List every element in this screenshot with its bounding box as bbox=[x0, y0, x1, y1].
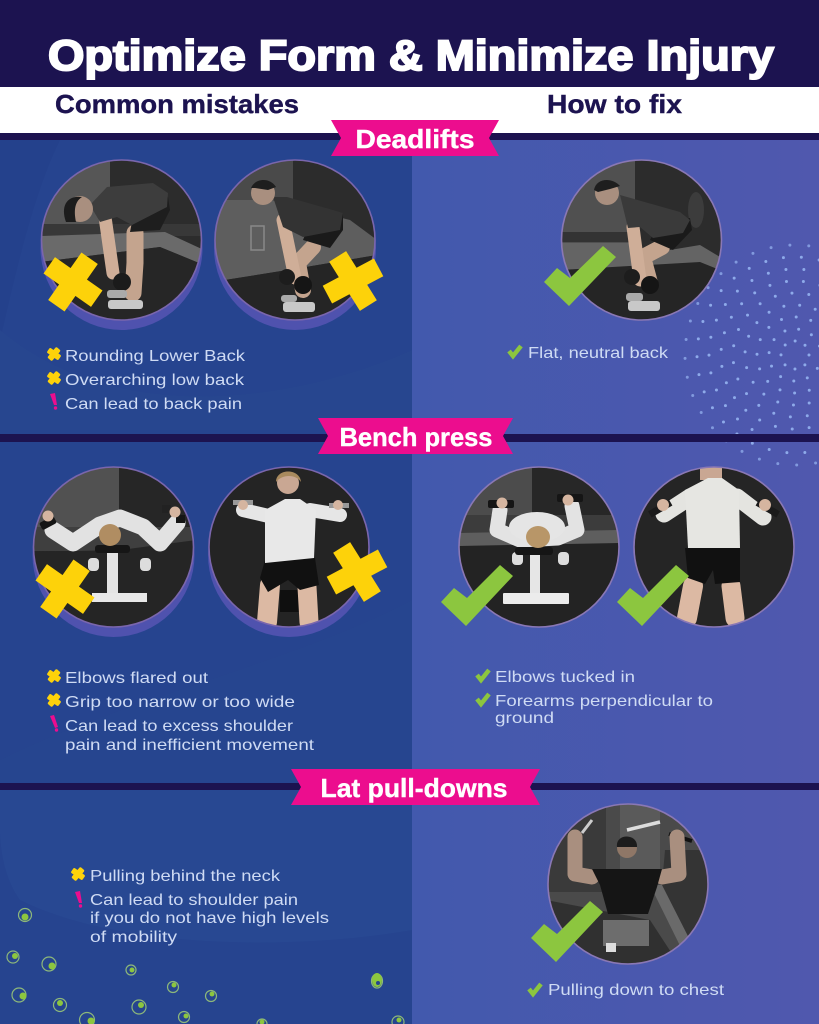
photo: deadlift overarched back bbox=[213, 158, 377, 330]
icon: large X deadlift 1 bbox=[44, 253, 102, 311]
list: deadlift mistakes bbox=[47, 347, 246, 413]
list: bench mistakes: Can lead to excess shoulder bbox=[65, 718, 294, 735]
list: deadlift mistakes: Overarching low back bbox=[65, 372, 245, 389]
photo: deadlift neutral back bbox=[560, 158, 725, 325]
list: bench mistakes bbox=[47, 669, 315, 754]
section bar: lat pull-downs bbox=[0, 783, 819, 790]
list: lat pull-down mistakes: if you do not have high levels bbox=[90, 910, 329, 927]
heading: how to fix: How to fix bbox=[547, 89, 683, 119]
list: deadlift mistakes: Rounding Lower Back bbox=[65, 348, 246, 365]
ribbon: Deadlifts: Deadlifts bbox=[356, 124, 474, 154]
icon: large check deadlift bbox=[544, 246, 616, 306]
header band bbox=[0, 0, 819, 87]
list: lat pull-down fix: Pulling down to chest bbox=[548, 982, 725, 999]
title: Optimize Form & Minimize Injury bbox=[48, 32, 774, 80]
icon: large check bench 2 bbox=[617, 565, 689, 626]
list: lat pull-down mistakes: Pulling behind the neck bbox=[90, 868, 281, 885]
photo: bench flared elbows front view bbox=[207, 466, 371, 637]
photo: bench tucked elbows top view bbox=[457, 466, 621, 630]
icon: large check lat pull-down bbox=[531, 901, 603, 962]
section bar: deadlifts bbox=[0, 133, 819, 140]
dotted pattern bbox=[685, 245, 819, 465]
ribbon: Bench press bbox=[318, 418, 513, 454]
list: lat pull-down mistakes: Can lead to shoulder pain bbox=[90, 892, 298, 909]
list: deadlift mistakes: Can lead to back pain bbox=[65, 396, 242, 413]
photo: lat pull-down bbox=[546, 802, 710, 966]
green dots pattern bbox=[7, 908, 404, 1024]
list: bench mistakes: Grip too narrow or too wide bbox=[65, 694, 295, 711]
icon: large X bench 2 bbox=[327, 542, 387, 602]
ribbon: Lat pull-downs: Lat pull-downs bbox=[320, 773, 508, 803]
list: bench fixes: Forearms perpendicular to bbox=[495, 693, 713, 710]
list: bench fixes: Elbows tucked in bbox=[495, 669, 635, 686]
photo: deadlift rounded back bbox=[40, 158, 204, 330]
list: deadlift fix: Flat, neutral back bbox=[528, 345, 669, 362]
heading: common mistakes: Common mistakes bbox=[55, 89, 299, 119]
list: bench mistakes: pain and inefficient movement bbox=[65, 737, 315, 754]
photo: bench flared elbows top view bbox=[32, 466, 196, 637]
ribbon: Lat pull-downs bbox=[291, 769, 540, 805]
ribbon: Bench press: Bench press bbox=[340, 422, 492, 452]
list: bench fixes: ground bbox=[495, 710, 554, 727]
list: bench mistakes: Elbows flared out bbox=[65, 670, 209, 687]
subheader band bbox=[0, 87, 819, 133]
panel: right background bbox=[412, 140, 819, 1024]
list: lat pull-down mistakes: of mobility bbox=[90, 929, 177, 946]
panel: left background bbox=[0, 140, 412, 1024]
list: bench fixes bbox=[477, 669, 713, 727]
section bar: bench press bbox=[0, 434, 819, 442]
icon: large X deadlift 2 bbox=[323, 251, 383, 311]
ribbon: Deadlifts bbox=[331, 120, 499, 156]
list: lat pull-down mistakes bbox=[71, 867, 329, 946]
icon: large check bench 1 bbox=[441, 565, 513, 626]
icon: large X bench 1 bbox=[36, 560, 94, 618]
photo: bench tucked elbows front view bbox=[632, 466, 796, 630]
